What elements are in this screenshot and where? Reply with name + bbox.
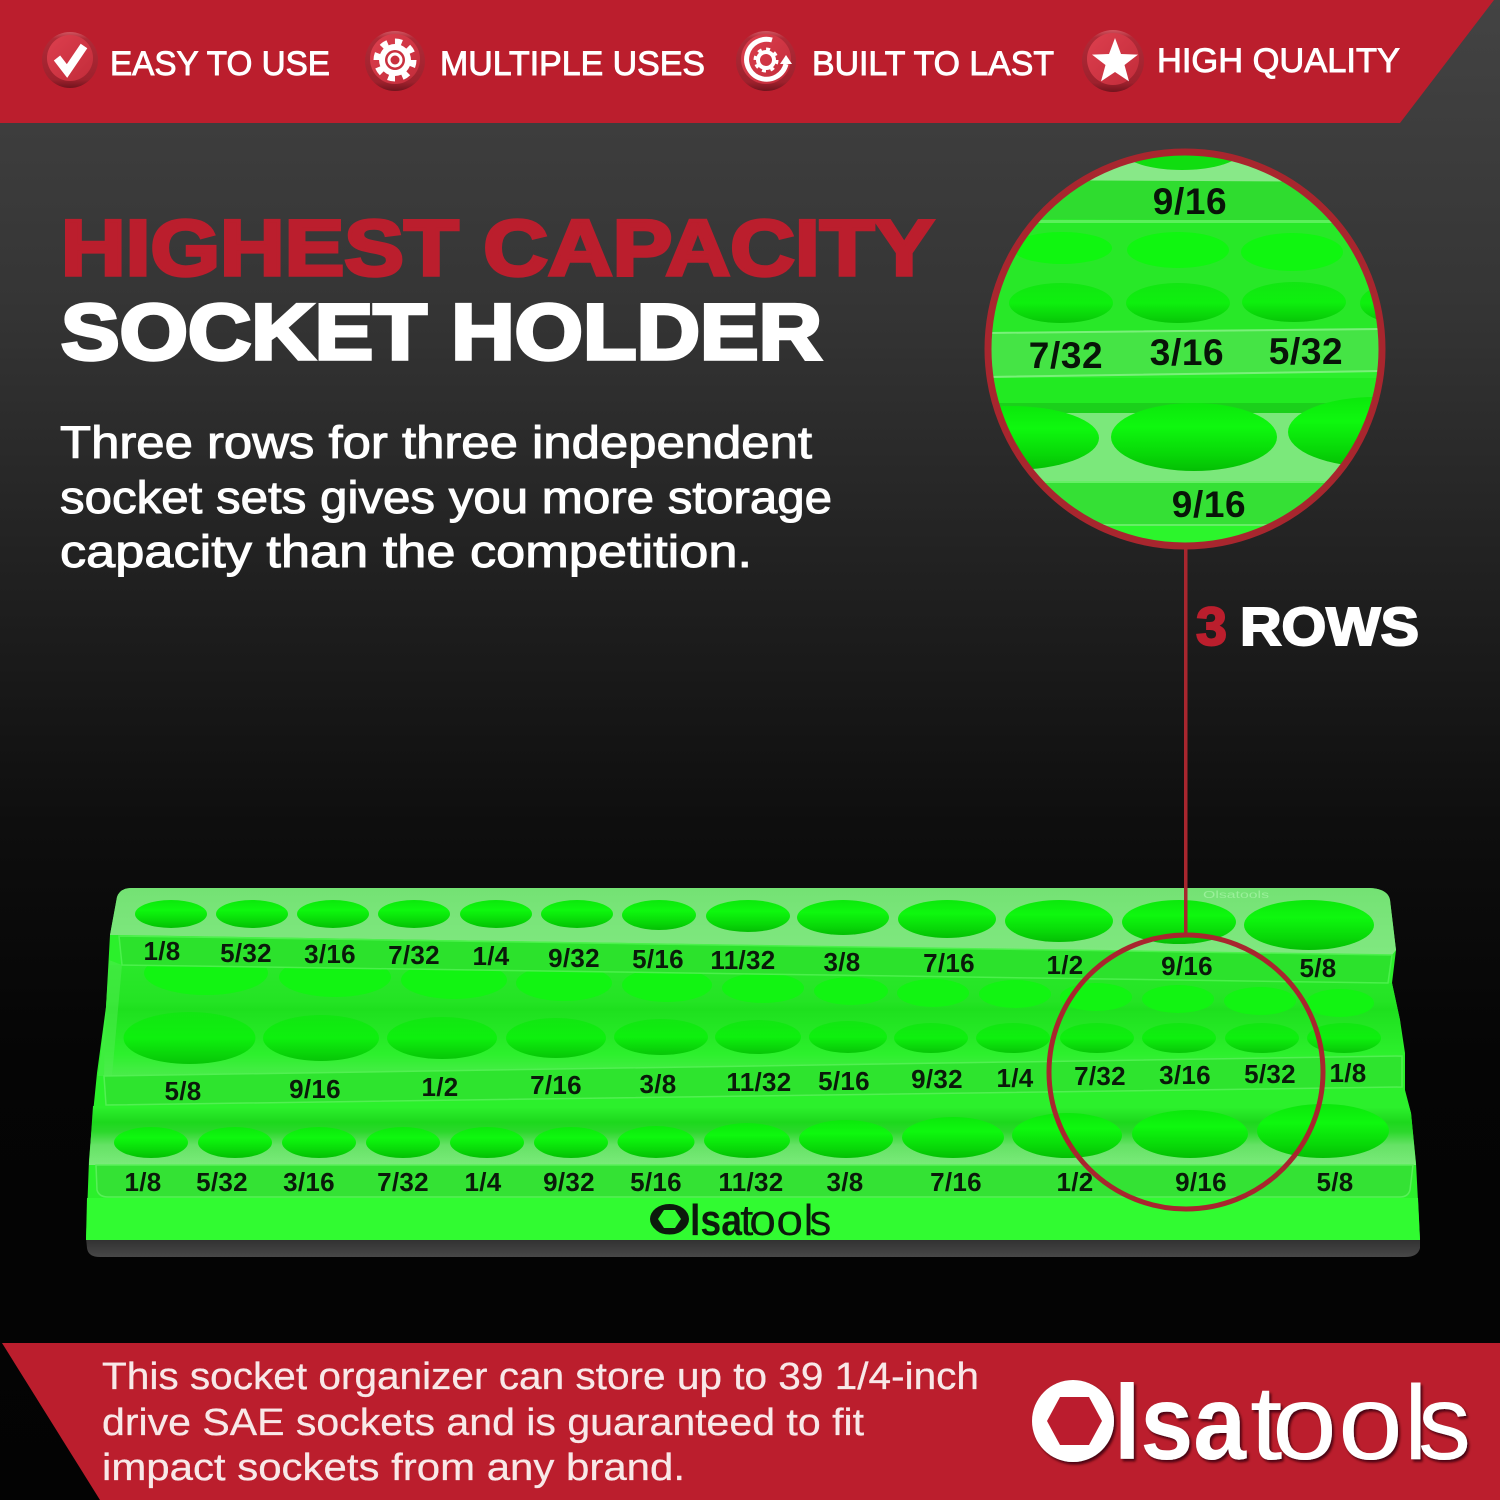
middle row holes — [124, 1012, 1381, 1064]
bottom description: This socket organizer can store up to 39 1/4-inch — [102, 1356, 979, 1398]
brand logo: O — [1032, 1365, 1114, 1483]
top row labels: 3/16 — [304, 939, 356, 969]
top banner — [0, 0, 1494, 123]
magnified middle strip — [985, 329, 1385, 377]
3 rows label: ROWS — [1240, 597, 1419, 657]
top row labels: 1/4 — [472, 941, 510, 971]
magnified labels: 5/32 — [1269, 331, 1343, 372]
top row labels: 5/16 — [632, 944, 684, 974]
faint engraved logo: Olsatools — [1203, 890, 1269, 901]
top row labels: 1/2 — [1046, 950, 1084, 980]
middle row labels: 3/16 — [1159, 1060, 1211, 1090]
magnified middle holes — [1009, 282, 1376, 323]
magnified lower surface — [1033, 413, 1340, 481]
top row label strip — [119, 936, 1392, 983]
middle row labels: 5/32 — [1244, 1059, 1296, 1089]
top row labels: 11/32 — [710, 945, 776, 975]
description text: capacity than the competition. — [60, 526, 752, 577]
bottom row labels: 1/2 — [1056, 1167, 1094, 1197]
top row labels: 7/32 — [388, 940, 440, 970]
magnified lower strip — [1044, 481, 1326, 526]
middle row labels: 5/16 — [818, 1066, 870, 1096]
product logo: too — [740, 1195, 803, 1245]
feature: built to last: BUILT TO LAST — [812, 45, 1054, 83]
bottom row label strip — [96, 1165, 1413, 1197]
bottom row labels: 7/32 — [377, 1167, 429, 1197]
top row holes — [135, 900, 1374, 950]
middle row labels — [164, 1058, 1367, 1106]
feature: multiple uses: MULTIPLE USES — [440, 45, 705, 83]
product logo: lsa — [690, 1196, 742, 1245]
holder body — [86, 888, 1420, 1240]
feature: easy to use: EASY TO USE — [110, 45, 330, 83]
brand logo: ls — [1404, 1364, 1471, 1482]
top row labels: 5/32 — [220, 938, 272, 968]
product logo: ls — [804, 1196, 831, 1245]
feature: built to last — [736, 31, 1054, 91]
socket holder product — [86, 888, 1420, 1257]
magnified labels: 9/16 — [1172, 484, 1246, 525]
magnified labels: 3/16 — [1150, 332, 1224, 373]
middle row labels: 1/4 — [996, 1063, 1034, 1093]
magnified labels: 7/32 — [1029, 335, 1103, 376]
middle row labels: 1/2 — [421, 1072, 459, 1102]
bottom row labels: 9/16 — [1175, 1167, 1227, 1197]
middle row labels: 11/32 — [726, 1067, 792, 1097]
magnified labels: 9/16 — [1153, 181, 1227, 222]
rubber base — [86, 1238, 1420, 1257]
bottom row labels: 1/4 — [464, 1167, 502, 1197]
magnified labels — [1029, 181, 1343, 525]
middle row labels: 1/8 — [1329, 1058, 1367, 1088]
magnified top strip — [1042, 180, 1329, 220]
front face — [86, 1198, 1420, 1240]
middle row labels: 7/16 — [530, 1070, 582, 1100]
bottom row labels: 5/8 — [1316, 1167, 1354, 1197]
bottom row labels: 3/8 — [826, 1167, 864, 1197]
middle row labels: 3/8 — [639, 1069, 677, 1099]
brand logo — [1032, 1363, 1471, 1483]
bottom banner — [2, 1343, 1500, 1500]
middle row labels: 7/32 — [1074, 1061, 1126, 1091]
description text — [60, 417, 832, 577]
top row labels: 5/8 — [1299, 953, 1337, 983]
headline — [61, 203, 934, 376]
bottom row labels: 7/16 — [930, 1167, 982, 1197]
headline: HIGHEST CAPACITY — [61, 203, 934, 292]
feature: easy to use — [42, 32, 330, 88]
3 rows label: 3 — [1196, 597, 1227, 657]
product logo: O — [650, 1197, 689, 1243]
bottom description — [102, 1356, 979, 1489]
bottom description: drive SAE sockets and is guaranteed to fit — [102, 1402, 864, 1444]
top row labels: 7/16 — [923, 948, 975, 978]
bottom row labels: 1/8 — [124, 1167, 162, 1197]
middle row labels: 9/16 — [289, 1074, 341, 1104]
middle row labels: 9/32 — [911, 1064, 963, 1094]
brand logo: lsa — [1114, 1364, 1247, 1482]
middle row labels: 5/8 — [164, 1076, 202, 1106]
lower tier surface — [89, 1086, 1416, 1165]
magnified top hole — [1134, 156, 1232, 170]
feature: high quality — [1082, 30, 1400, 92]
top row labels — [143, 936, 1337, 983]
description text: Three rows for three independent — [60, 417, 813, 468]
bottom description: impact sockets from any brand. — [102, 1447, 685, 1489]
top tier surface — [110, 888, 1396, 955]
product logo — [650, 1195, 831, 1245]
brand logo: too — [1250, 1363, 1403, 1482]
magnified ghost holes — [1012, 232, 1343, 271]
bottom row labels: 3/16 — [283, 1167, 335, 1197]
headline: SOCKET HOLDER — [61, 287, 822, 376]
ghost holes behind top tier — [144, 951, 1374, 1017]
bottom row labels: 11/32 — [718, 1167, 784, 1197]
left tier highlight — [98, 960, 122, 1076]
top row labels: 1/8 — [143, 936, 181, 966]
bottom row holes — [114, 1104, 1389, 1158]
feature: high quality: HIGH QUALITY — [1157, 42, 1400, 80]
bottom row labels: 9/32 — [543, 1167, 595, 1197]
top row labels: 9/32 — [548, 943, 600, 973]
bottom row labels: 5/16 — [630, 1167, 682, 1197]
bottom row labels: 5/32 — [196, 1167, 248, 1197]
top row labels: 3/8 — [823, 947, 861, 977]
top row labels: 9/16 — [1161, 951, 1213, 981]
bottom row labels — [124, 1167, 1354, 1197]
magnified lower holes — [1000, 397, 1372, 471]
magnified detail circle — [984, 148, 1386, 550]
middle row label strip — [104, 1056, 1402, 1105]
second tier surface — [104, 965, 1403, 1076]
callout circle on product — [1049, 935, 1323, 1209]
connector line — [1184, 546, 1188, 936]
feature: multiple uses — [365, 31, 705, 91]
description text: socket sets gives you more storage — [60, 472, 832, 523]
